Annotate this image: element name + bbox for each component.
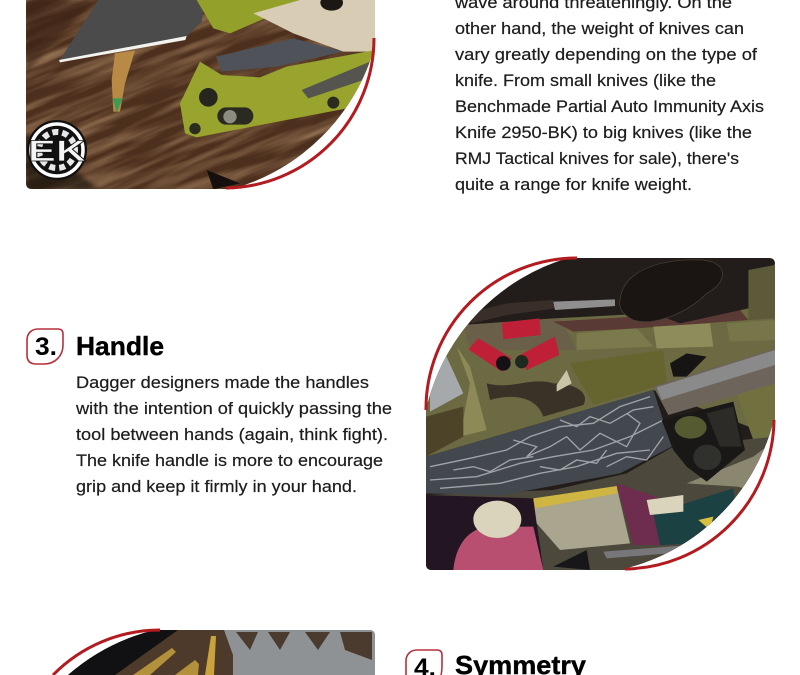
text block: knife weight paragraph bbox=[454, 0, 764, 194]
text block: knife weight paragraph: Benchmade Partial Auto Immunity Axis bbox=[455, 97, 764, 116]
text block: handle paragraph: tool between hands (again, think fight). bbox=[76, 425, 388, 444]
text block: knife weight paragraph: vary greatly depending on the type of bbox=[455, 45, 757, 64]
accent arc: top-left red outline bbox=[426, 258, 577, 410]
accent arc: red outline bbox=[226, 38, 374, 188]
text block: handle paragraph bbox=[75, 373, 392, 496]
badge: number 3: 3. bbox=[35, 333, 57, 361]
panel: handle section photo bbox=[426, 258, 776, 571]
heading: Handle: Handle bbox=[76, 331, 164, 361]
photo: knives on wood table bbox=[26, 0, 375, 189]
icon: EK logo badge bbox=[27, 120, 87, 180]
accent arc: red outline bbox=[53, 630, 160, 675]
photo: damascus knife on camo and comics bbox=[426, 258, 776, 571]
text block: knife weight paragraph: Knife 2950-BK) to big knives (like the bbox=[455, 123, 752, 142]
accent arc: bottom-right red outline bbox=[625, 420, 774, 569]
text block: knife weight paragraph: quite a range for knife weight. bbox=[455, 175, 692, 194]
text block: handle paragraph: Dagger designers made the handles bbox=[76, 373, 369, 392]
badge: number 4 bbox=[406, 650, 442, 675]
text block: handle paragraph: grip and keep it firmly in your hand. bbox=[76, 477, 357, 496]
panel: weight section top photo bbox=[26, 0, 376, 190]
text block: knife weight paragraph: knife. From small knives (like the bbox=[455, 71, 716, 90]
text block: knife weight paragraph: other hand, the weight of knives can bbox=[455, 19, 744, 38]
photo: brass casings and metal knuckles bbox=[60, 630, 376, 675]
text block: handle paragraph: with the intention of quickly passing the bbox=[75, 399, 392, 418]
text block: knife weight paragraph: RMJ Tactical knives for sale), there's bbox=[455, 149, 739, 168]
icon: EK logo badge: EK bbox=[28, 135, 86, 168]
text block: handle paragraph: The knife handle is more to encourage bbox=[76, 451, 383, 470]
panel: symmetry section photo bbox=[53, 630, 376, 675]
badge: number 3 bbox=[27, 329, 63, 364]
